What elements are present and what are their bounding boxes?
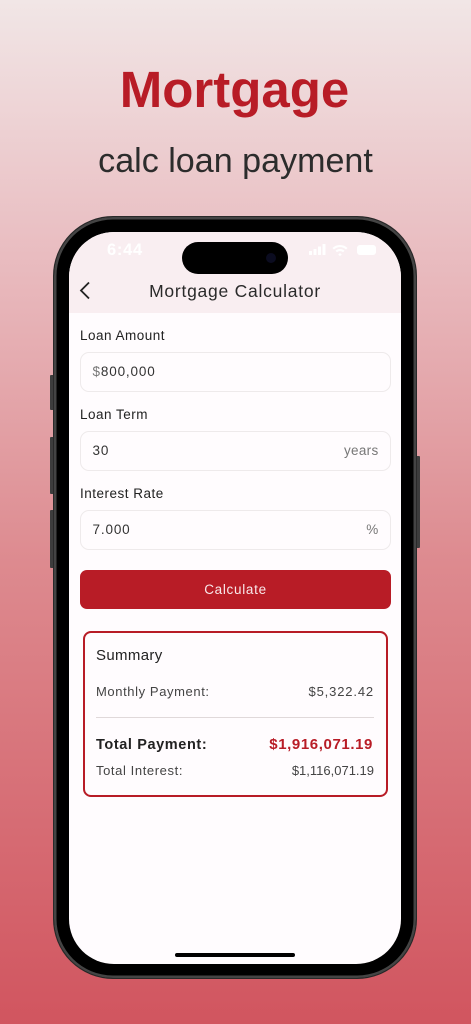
total interest value: $1,116,071.19 [292,763,374,778]
panel: summary [83,631,388,797]
total payment label: Total Payment: [96,737,207,753]
subtitle: calc loan payment [98,142,373,180]
loan amount label: Loan Amount [80,328,165,343]
loan term label: Loan Term [80,407,148,422]
screen title: Mortgage Calculator [149,281,321,301]
phone body [53,216,417,979]
phone screen [69,232,401,964]
percent unit: % [366,522,378,537]
status icons [309,244,376,256]
phone side buttons [50,375,420,568]
monthly payment value: $5,322.42 [309,684,374,699]
phone mockup [50,216,420,979]
calculate button [80,570,391,609]
interest rate label: Interest Rate [80,486,164,501]
years unit: years [344,443,378,458]
loan amount field [80,352,391,392]
total interest label: Total Interest: [96,763,183,778]
monthly payment label: Monthly Payment: [96,684,210,699]
dynamic island [182,242,288,274]
back arrow [80,282,90,300]
interest rate value: 7.000 [92,522,131,537]
loan term value: 30 [92,443,109,458]
loan amount value: $800,000 [92,364,156,379]
summary heading: Summary [96,647,163,664]
loan term field [80,431,391,471]
app header [69,232,401,313]
calculate button: Calculate [204,582,267,597]
interest rate field [80,510,391,550]
divider [96,717,374,718]
status bar time: 6:44 [107,241,143,259]
home indicator [175,953,295,957]
total payment value: $1,916,071.19 [269,736,373,753]
title: Mortgage [120,61,349,118]
camera lens [266,253,276,263]
